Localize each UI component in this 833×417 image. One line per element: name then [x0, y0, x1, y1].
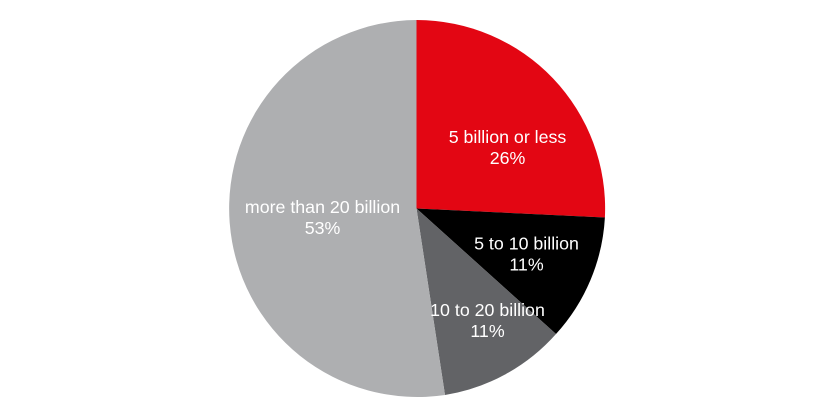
label: more than 20 billion: more than 20 billion: [245, 197, 400, 217]
label: 10 to 20 billion: 11%: [470, 321, 505, 341]
slice: 10 to 20 billion 11%: [416, 208, 556, 395]
label: more than 20 billion: 53%: [305, 218, 340, 238]
slice: more than 20 billion 53%: [229, 20, 445, 397]
label: 5 billion or less: 5 billion or less: [449, 127, 566, 147]
slice: 5 billion or less 26%: [416, 20, 605, 217]
label: 5 to 10 billion: 11%: [509, 254, 544, 274]
label: 5 billion or less: 26%: [490, 148, 525, 168]
label: 5 to 10 billion: 5 to 10 billion: [474, 234, 579, 254]
slice: 5 to 10 billion 11%: [416, 208, 605, 334]
label: 10 to 20 billion: 10 to 20 billion: [430, 300, 545, 320]
